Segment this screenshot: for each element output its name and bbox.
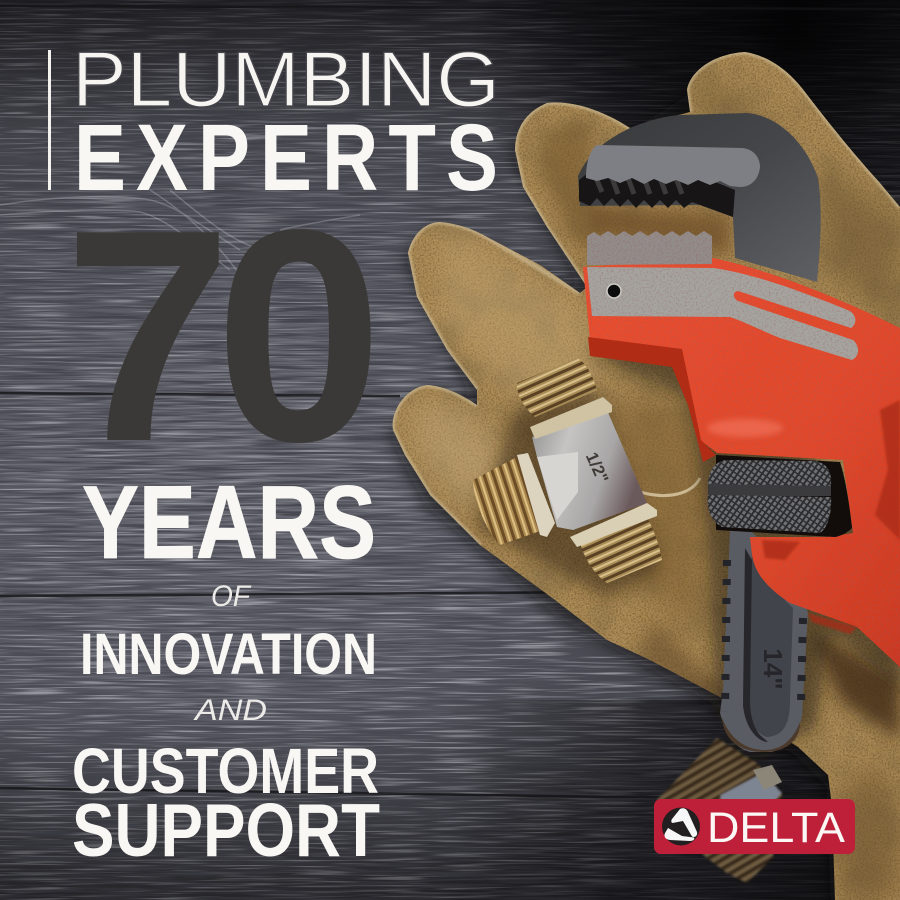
handle foot [722,718,800,752]
pipe wrench [578,113,900,760]
upper hook jaw [578,113,821,282]
bottom brass fitting behind logo [657,738,782,883]
tooth tops [596,178,682,194]
left collar [517,453,555,537]
glove folds [640,478,700,496]
lower thread [580,517,662,583]
leather glove [380,40,900,900]
text: years: YEARS [82,465,376,581]
heading: Experts: EXPERTS [74,105,498,211]
text: customer: CUSTOMER [72,735,379,807]
fitting shadow [476,388,661,598]
text: innovation: INNOVATION [80,622,377,687]
red highlight [707,419,783,437]
jaw face [586,145,760,187]
glove colour zones [440,222,600,400]
title rule [48,50,51,190]
red underside [588,337,716,462]
dark teeth [579,170,735,217]
lower jaw serrated [587,231,712,265]
heading: Plumbing: PLUMBING [72,35,500,123]
wrench shadow [586,320,900,760]
top collar [530,397,612,439]
red shade [762,400,900,634]
logo wordmark: DELTA [707,804,845,852]
text: support: SUPPORT [72,788,380,872]
icon: delta mark [662,808,700,846]
glove shape [380,40,900,900]
cavity behind knurl [716,455,852,537]
adjusting knurl [708,460,831,533]
red body [583,258,900,667]
left thread [473,457,543,545]
plate hole [607,284,621,298]
text: and: AND [193,694,267,727]
branch highlight [537,452,578,520]
silver plate [587,267,858,360]
brass T fitting [473,358,662,598]
big number: 70: 70 [64,167,383,504]
size marking: 1/2" [582,449,612,486]
glove shadow [389,61,896,900]
text: of: OF [211,580,252,613]
logo: Delta [654,799,855,854]
handle size marking: 14" [758,648,788,690]
silver body [532,410,647,530]
handle serrations [725,560,803,712]
top thread [517,358,597,417]
wrench handle [720,530,808,752]
lower collar [570,503,657,547]
glove edge light [393,52,900,545]
